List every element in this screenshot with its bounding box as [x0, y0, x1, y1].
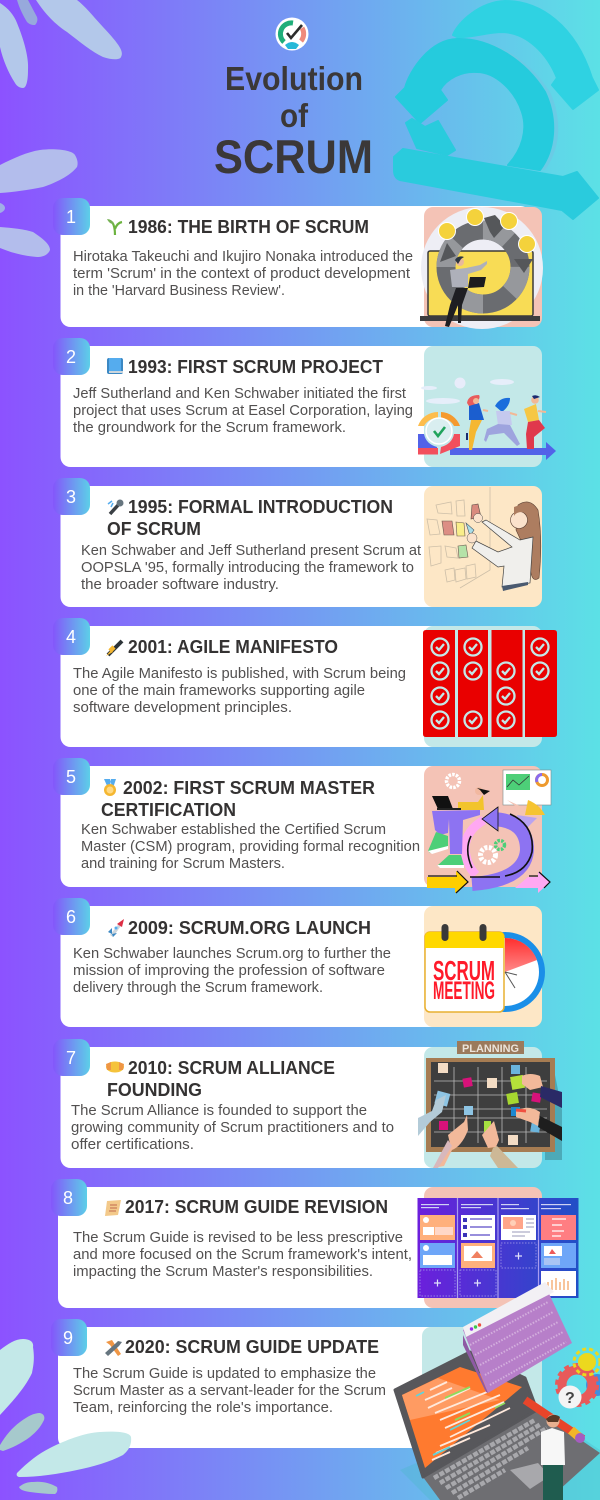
card background: [58, 1187, 530, 1308]
illustration: team running: [418, 346, 556, 467]
heading: [107, 1057, 335, 1100]
body text: [73, 1230, 412, 1280]
body text: and training for Scrum Masters.: [81, 856, 285, 872]
body text: Ken Schwaber established the Certified Scrum: [81, 822, 386, 838]
illustration: planning board: [418, 1041, 562, 1168]
illustration: red kanban of checks: [423, 626, 557, 747]
card background: [60, 1047, 530, 1168]
runner 1: [466, 395, 488, 450]
gears: ?: [565, 1390, 575, 1407]
illustration: laptop and scrum master: [395, 1282, 600, 1500]
body text: and more focused on the Scrum framework's intent,: [73, 1247, 412, 1263]
body text: Hirotaka Takeuchi and Ikujiro Nonaka introduced the: [73, 249, 413, 265]
number badge: [51, 1319, 87, 1356]
number badge: 4: [66, 627, 76, 647]
heading: 1995: FORMAL INTRODUCTION: [128, 496, 393, 517]
panel: step 7: [53, 1039, 562, 1168]
icon: seedling: [107, 219, 122, 235]
body text: in the 'Harvard Business Review'.: [73, 283, 285, 299]
body text: term 'Scrum' in the context of product development: [73, 266, 410, 282]
body text: The Agile Manifesto is published, with Scrum being: [73, 666, 406, 682]
pencil and man: [525, 1400, 585, 1500]
body text: project that uses Scrum at Easel Corporation, laying: [73, 403, 413, 419]
card background: [60, 766, 530, 887]
number badge: [53, 758, 90, 795]
panel: step 5: [53, 758, 551, 893]
icon: handshake: [106, 1062, 124, 1072]
illustration: scrum meeting calendar and clock: MEETING: [433, 977, 495, 1005]
arrows: [427, 871, 468, 893]
heading: 1993: FIRST SCRUM PROJECT: [128, 356, 384, 377]
body text: [73, 666, 406, 716]
icon: microphone: [108, 500, 124, 514]
panel: step 9: [51, 1282, 600, 1500]
card background: [60, 486, 530, 607]
number badge: 8: [63, 1188, 73, 1208]
body text: The Scrum Guide is updated to emphasize the: [73, 1366, 376, 1382]
pink left arc: [465, 820, 484, 875]
body text: [73, 386, 413, 436]
panel: step 1: [53, 198, 543, 329]
heading: 1986: THE BIRTH OF SCRUM: [128, 216, 369, 237]
number badge: 1: [66, 207, 76, 227]
number badge: [51, 1179, 87, 1216]
body text: the groundwork for the Scrum framework.: [73, 420, 346, 436]
number badge: [53, 198, 90, 235]
icon: rocket: [108, 919, 124, 937]
body text: The Scrum Guide is revised to be less prescriptive: [73, 1230, 403, 1246]
body text: [81, 543, 421, 593]
hands: [418, 1074, 562, 1168]
card background: [60, 346, 530, 467]
heading: 2010: SCRUM ALLIANCE: [128, 1057, 335, 1078]
icon: scroll: [105, 1200, 121, 1216]
decorative petals top left: [0, 0, 122, 257]
panel: step 8: [51, 1179, 578, 1308]
heading: OF SCRUM: [107, 518, 201, 539]
decorative petals bottom left: [0, 1339, 131, 1494]
body text: software development principles.: [73, 700, 292, 716]
card background: [58, 1327, 530, 1448]
number badge: [53, 478, 90, 515]
body text: [81, 822, 420, 872]
heading: CERTIFICATION: [101, 799, 236, 820]
body text: delivery through the Scrum framework.: [73, 980, 323, 996]
number badge: [53, 338, 90, 375]
body text: [73, 1366, 386, 1416]
body text: offer certifications.: [71, 1137, 194, 1153]
logo: [276, 18, 308, 50]
runner 2: [484, 398, 520, 446]
body text: Scrum Master as a servant-leader for the Scrum: [73, 1383, 386, 1399]
heading: FOUNDING: [107, 1079, 202, 1100]
heading: 2009: SCRUM.ORG LAUNCH: [128, 917, 371, 938]
card background: [60, 206, 530, 327]
heading: 2020: SCRUM GUIDE UPDATE: [125, 1336, 379, 1357]
heading: [107, 496, 393, 539]
heading: 2001: AGILE MANIFESTO: [128, 636, 338, 657]
keyboard: [434, 1420, 547, 1498]
number badge: [53, 1039, 90, 1076]
purple cycle arc: [472, 819, 527, 884]
icon: scrum loop arrows: [394, 1, 598, 219]
heading: 2017: SCRUM GUIDE REVISION: [125, 1196, 388, 1217]
title: [214, 60, 373, 183]
body text: growing community of Scrum practitioners and to: [71, 1120, 394, 1136]
icon: blue book: [107, 358, 123, 374]
body text: Ken Schwaber launches Scrum.org to further the: [73, 946, 391, 962]
icon: fountain pen: [106, 641, 122, 656]
icon: hammer and wrench: [105, 1340, 122, 1356]
card background: [60, 626, 530, 747]
heading: 2002: FIRST SCRUM MASTER: [123, 777, 375, 798]
title: Evolution: [225, 60, 363, 97]
illustration: scrum master on cycle: [424, 766, 551, 893]
panel: step 3: [53, 478, 542, 607]
illustration: storyboard columns: [418, 1187, 578, 1308]
body text: Master (CSM) program, providing formal recognition: [81, 839, 420, 855]
body text: [73, 946, 391, 996]
runner 3: [524, 395, 546, 449]
body text: the broader software industry.: [81, 577, 279, 593]
number badge: [53, 618, 90, 655]
heading: [101, 777, 375, 820]
panel: step 4: [53, 618, 557, 747]
body text: Team, reinforcing the role's importance.: [73, 1400, 333, 1416]
woman with laptop: [432, 810, 480, 854]
body text: mission of improving the profession of software: [73, 963, 385, 979]
illustration: scrum meeting calendar and clock: [424, 906, 545, 1027]
number badge: 5: [66, 767, 76, 787]
number badge: 9: [63, 1328, 73, 1348]
body text: [71, 1103, 394, 1153]
illustration: scrum laptop: [420, 207, 543, 329]
card background: [60, 906, 530, 1027]
body text: Ken Schwaber and Jeff Sutherland present Scrum at: [81, 543, 421, 559]
body text: [73, 249, 413, 299]
number badge: 3: [66, 487, 76, 507]
body text: OOPSLA '95, formally introducing the framework to: [81, 560, 414, 576]
number badge: [53, 898, 90, 935]
illustration: sticky notes: [424, 486, 542, 607]
body text: Jeff Sutherland and Ken Schwaber initiated the first: [73, 386, 406, 402]
body text: impacting the Scrum Master's responsibilities.: [73, 1264, 373, 1280]
body text: The Scrum Alliance is founded to support the: [71, 1103, 367, 1119]
illustration: scrum meeting calendar and clock: SCRUM: [433, 955, 495, 986]
title: of: [280, 97, 309, 134]
panel: step 6: [53, 898, 545, 1027]
title: SCRUM: [214, 130, 373, 183]
panel: step 2: [53, 338, 556, 467]
gears: [557, 1349, 600, 1408]
number badge: 6: [66, 907, 76, 927]
number badge: 2: [66, 347, 76, 367]
body text: one of the main frameworks supporting agile: [73, 683, 365, 699]
number badge: 7: [66, 1048, 76, 1068]
planning label: PLANNING: [462, 1043, 519, 1055]
icon: medal: [104, 779, 116, 796]
window panel: [463, 1282, 572, 1393]
